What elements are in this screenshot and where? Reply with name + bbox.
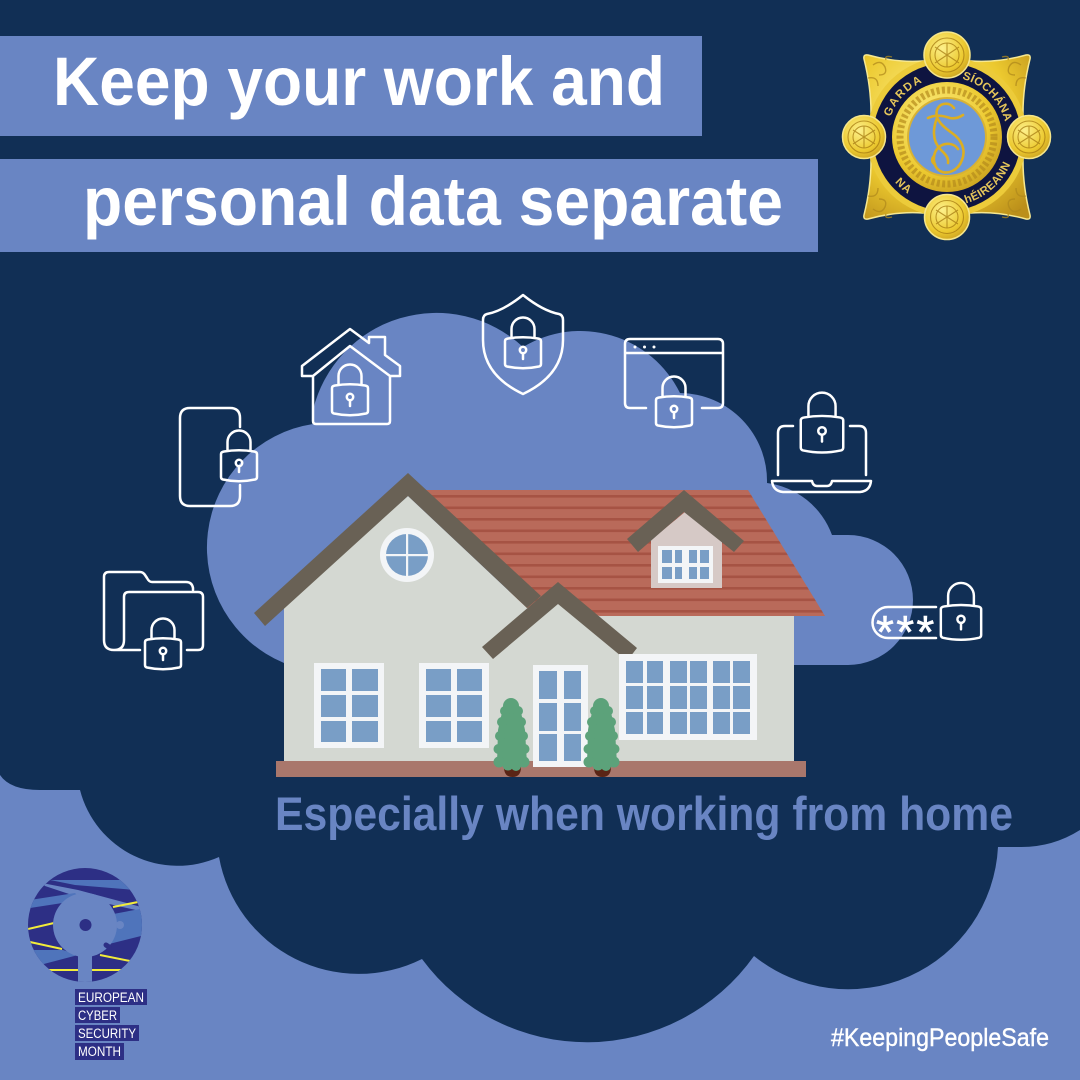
logo: European Cyber Security Month bbox=[28, 868, 147, 1060]
title banner line 2: personal data separate bbox=[83, 163, 783, 240]
wall bbox=[284, 496, 794, 761]
logo: Garda Siochana badge bbox=[842, 31, 1052, 240]
badge gold silhouette bbox=[864, 55, 1030, 219]
title banner line 1: Keep your work and bbox=[53, 43, 665, 120]
icon: locked browser window bbox=[625, 339, 723, 427]
base step bbox=[276, 761, 806, 777]
icon: locked password field: *** bbox=[876, 606, 937, 658]
subheading: Especially when working from home bbox=[275, 787, 1013, 840]
main gable trim bbox=[254, 473, 541, 626]
corner scrolls bbox=[868, 56, 1026, 218]
badge lettering: SÍOCHÁNA bbox=[963, 72, 1012, 122]
icon: locked shield bbox=[483, 295, 563, 394]
badge lettering: NA bbox=[895, 177, 910, 194]
gold outer ring bbox=[867, 57, 1027, 217]
panel: light cloud behind house bbox=[207, 313, 913, 665]
window right bbox=[619, 654, 757, 740]
window left bbox=[314, 663, 384, 748]
badge lettering bbox=[884, 72, 1012, 204]
plant right bbox=[584, 698, 620, 777]
blue centre bbox=[907, 97, 987, 177]
icon: locked phone bbox=[180, 408, 257, 506]
icon: locked laptop bbox=[772, 393, 871, 492]
logo yellow lines bbox=[28, 902, 138, 970]
gold inner ring bbox=[892, 82, 1002, 192]
logo word: CYBER: CYBER bbox=[78, 1008, 117, 1023]
badge lettering: hÉIREANN bbox=[964, 162, 1010, 204]
roof bbox=[425, 490, 825, 616]
logo word: EUROPEAN: EUROPEAN bbox=[78, 990, 144, 1005]
front gable trim bbox=[482, 582, 637, 661]
icon: locked folder bbox=[104, 572, 203, 669]
logo word: SECURITY: SECURITY bbox=[78, 1026, 136, 1041]
logo keyhole bbox=[53, 893, 117, 957]
illustration: house bbox=[254, 473, 830, 777]
dormer bbox=[627, 490, 744, 588]
roundels bbox=[842, 32, 1050, 240]
icon: locked home bbox=[302, 329, 400, 424]
logo word: MONTH: MONTH bbox=[78, 1044, 121, 1059]
round window bbox=[380, 528, 434, 582]
dark ring bbox=[873, 63, 1021, 211]
logo mark bbox=[28, 868, 145, 985]
door bbox=[533, 665, 588, 767]
logo bands bbox=[50, 880, 130, 890]
monogram bbox=[928, 104, 964, 173]
roof tile stripes bbox=[420, 495, 830, 613]
badge lettering: GARDA bbox=[884, 76, 922, 116]
hashtag: #KeepingPeopleSafe bbox=[831, 1024, 1049, 1052]
window middle bbox=[419, 663, 489, 748]
plant left bbox=[494, 698, 530, 777]
icon: locked password field bbox=[872, 583, 981, 658]
